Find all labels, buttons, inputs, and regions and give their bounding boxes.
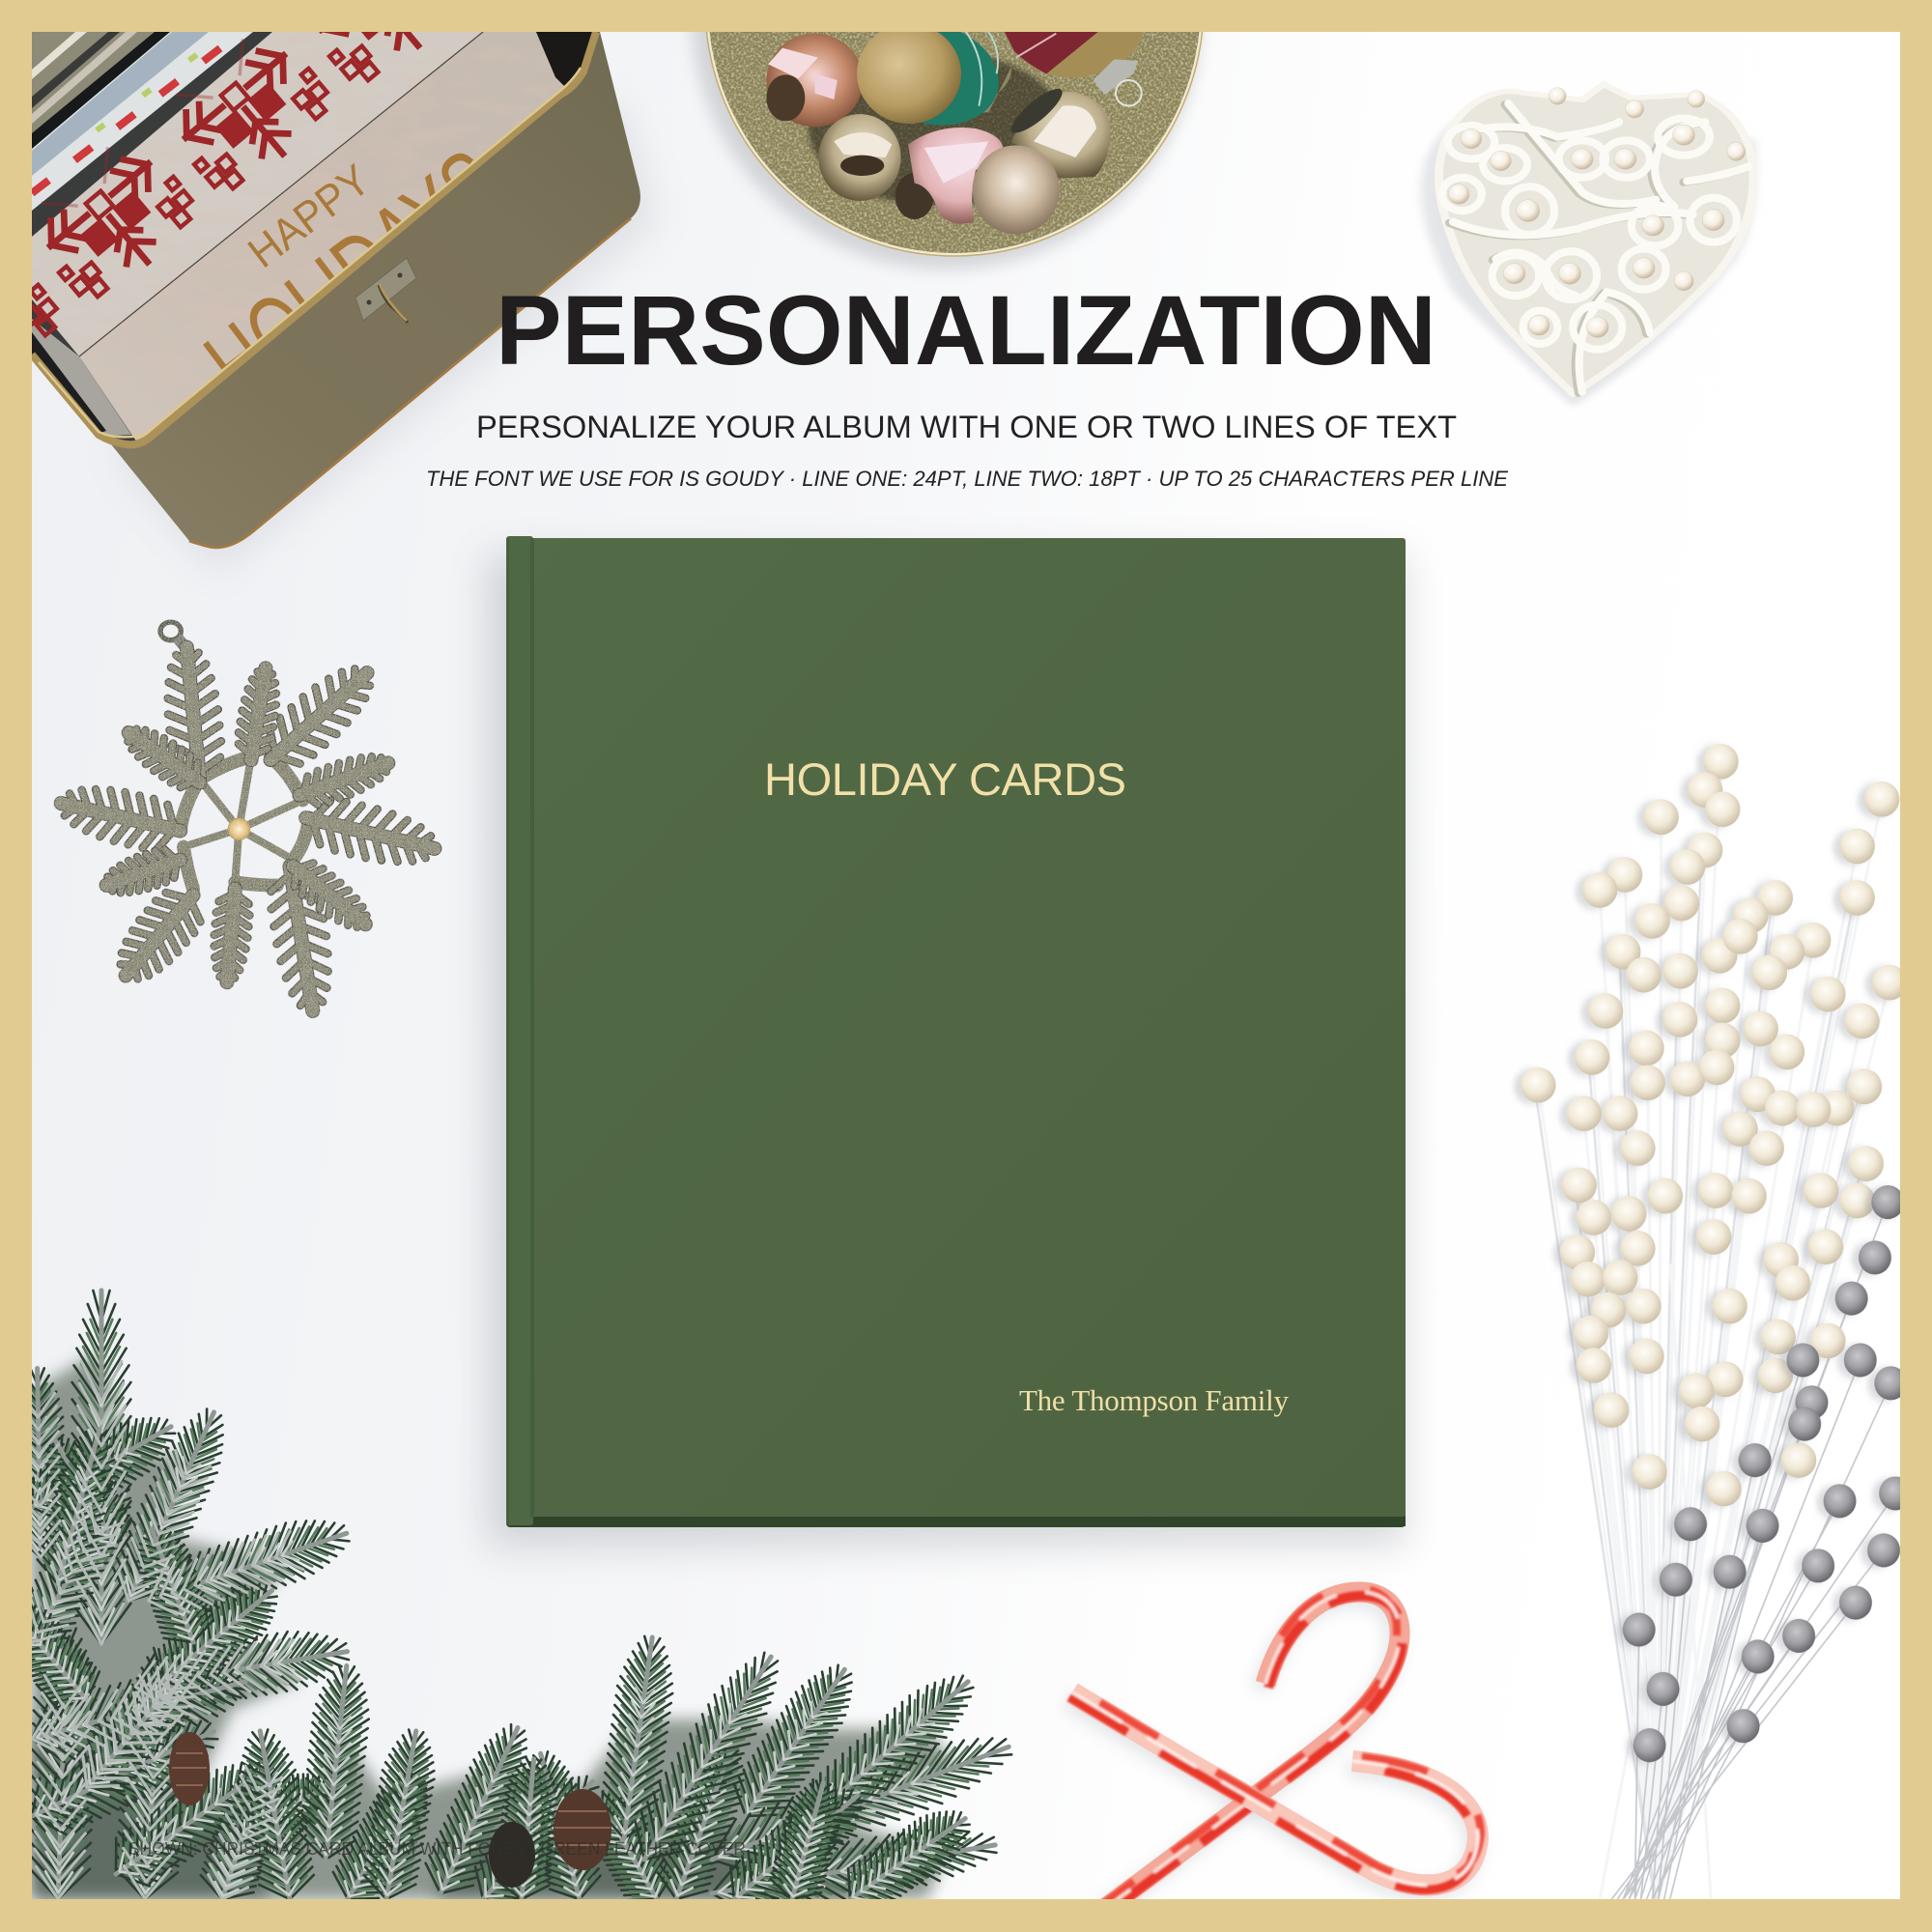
tin text: happy holidays: HAPPY bbox=[239, 155, 379, 277]
panel: green album bbox=[488, 536, 1406, 1546]
photo: bowl of ornaments bbox=[692, 0, 1204, 270]
photo: frosted pine branches bbox=[0, 1291, 1019, 1920]
ornaments bbox=[766, 32, 1144, 234]
caption over pine: SHOWN: CHRISTMAS CARD ALBUM WITH FOREST GREEN LEATHER COVER bbox=[128, 1839, 746, 1859]
tin text: happy holidays bbox=[203, 153, 473, 369]
title: PERSONALIZATION bbox=[496, 275, 1436, 385]
subtitle: PERSONALIZE YOUR ALBUM WITH ONE OR TWO LINES OF TEXT bbox=[476, 410, 1457, 444]
photo: candy canes bbox=[1067, 1588, 1481, 1915]
silver berries bbox=[1623, 1185, 1912, 1762]
album title foil: HOLIDAY CARDS bbox=[764, 753, 1126, 805]
album name foil: The Thompson Family bbox=[1019, 1383, 1289, 1417]
photo: pearl and silver berry sprays bbox=[1520, 744, 1912, 1902]
icon: red snowflake pattern bbox=[32, 32, 423, 444]
pearl berries bbox=[1520, 744, 1907, 1506]
icon: pine cones bbox=[169, 1732, 611, 1888]
font details line: THE FONT WE USE FOR IS GOUDY · LINE ONE: 24PT, LINE TWO: 18PT · UP TO 25 CHARACTERS PER LINE bbox=[426, 467, 1508, 491]
photo: holiday card tin bbox=[32, 32, 655, 562]
album spine bbox=[506, 536, 534, 1525]
pearls bbox=[1448, 88, 1746, 337]
tin text: happy holidays: HOLIDAYS bbox=[185, 128, 524, 421]
spray stems bbox=[1535, 852, 1862, 1902]
icon: tin clasp bbox=[355, 258, 416, 323]
photo: white filigree heart bbox=[1421, 84, 1755, 407]
photo: glitter snowflake ornament bbox=[55, 622, 440, 1015]
